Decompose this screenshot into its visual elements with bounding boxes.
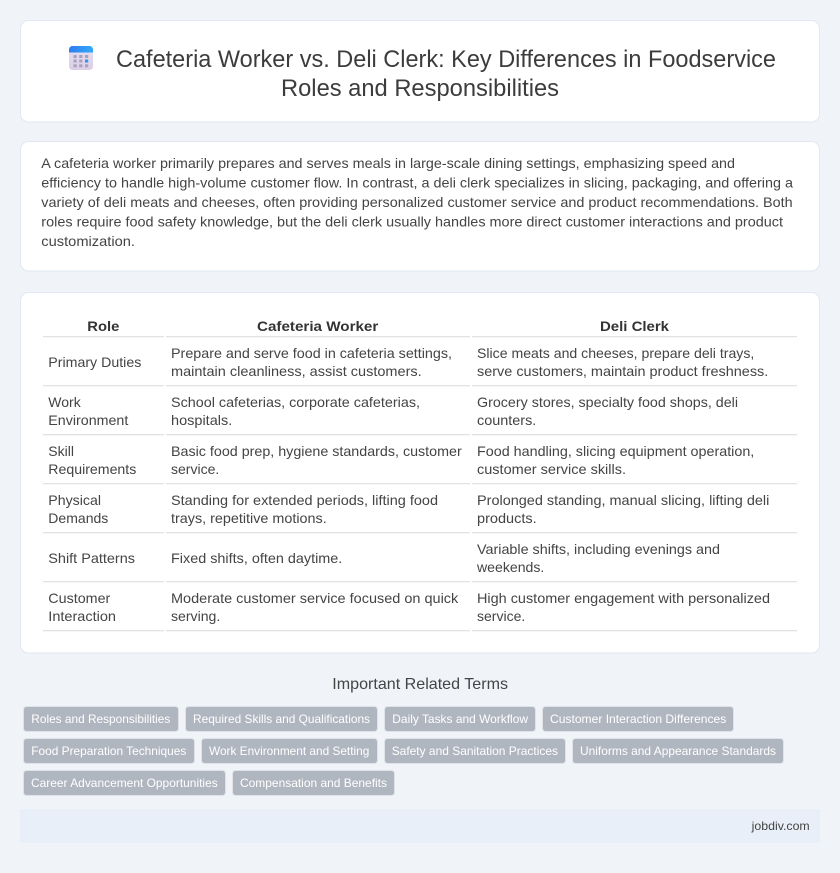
row: skill requirements: service. bbox=[171, 461, 219, 477]
row: physical demands: Prolonged standing, manual slicing, lifting deli bbox=[477, 492, 769, 508]
tag list: related terms: Uniforms and Appearance Standards bbox=[580, 744, 776, 758]
row: work environment: Work bbox=[48, 394, 82, 410]
title: Roles and Responsibilities bbox=[281, 75, 559, 102]
row: work environment: Grocery stores, specialty food shops, deli bbox=[477, 394, 738, 410]
tag list: related terms: Work Environment and Setting bbox=[209, 744, 369, 758]
text block: summary paragraph: roles require food safety knowledge, but the deli clerk usually handles more direct customer interactions and product bbox=[41, 213, 783, 229]
panel: introduction bbox=[20, 142, 820, 271]
row: skill requirements: Requirements bbox=[48, 461, 136, 477]
row: physical demands: Standing for extended periods, lifting food bbox=[171, 492, 438, 508]
row: customer interaction: serving. bbox=[171, 608, 220, 624]
row: work environment: counters. bbox=[477, 412, 536, 428]
row: customer interaction: Moderate customer service focused on quick bbox=[171, 590, 459, 606]
title: Cafeteria Worker vs. Deli Clerk: Key Differences in Foodservice bbox=[116, 46, 776, 73]
table header row: Cafeteria Worker bbox=[257, 318, 379, 334]
row: skill requirements: Basic food prep, hygiene standards, customer bbox=[171, 443, 462, 459]
table header row: Deli Clerk bbox=[600, 318, 669, 334]
text block: summary paragraph: efficiency to handle high-volume customer flow. In contrast, a deli clerk specializes in slicing, packaging, and offering a bbox=[41, 174, 793, 190]
tag list: related terms: Food Preparation Techniques bbox=[31, 744, 186, 758]
tag list: related terms bbox=[24, 706, 784, 796]
row: skill requirements: customer service skills. bbox=[477, 461, 626, 477]
row: skill requirements bbox=[48, 443, 754, 477]
tag list: related terms: Daily Tasks and Workflow bbox=[392, 712, 528, 726]
row: physical demands: Demands bbox=[48, 510, 108, 526]
text block: summary paragraph: customization. bbox=[41, 233, 135, 249]
row: customer interaction bbox=[48, 590, 770, 624]
row: customer interaction: High customer engagement with personalized bbox=[477, 590, 770, 606]
tag list: related terms: Compensation and Benefits bbox=[240, 776, 387, 790]
tag list: related terms: Required Skills and Qualifications bbox=[193, 712, 370, 726]
row: work environment bbox=[48, 394, 738, 428]
text block: summary paragraph: variety of deli meats and cheeses, often providing personalized customer service and product recommendations. Both bbox=[41, 194, 793, 210]
footer bbox=[20, 809, 820, 843]
heading: related terms: Important Related Terms bbox=[332, 676, 508, 693]
row: customer interaction: Customer bbox=[48, 590, 111, 606]
row: shift patterns: Variable shifts, including evenings and bbox=[477, 541, 720, 557]
row: primary duties: Primary Duties bbox=[48, 354, 141, 370]
tag list: related terms: Safety and Sanitation Practices bbox=[392, 744, 558, 758]
table header row: Role bbox=[87, 318, 120, 334]
row: primary duties: Slice meats and cheeses, prepare deli trays, bbox=[477, 345, 754, 361]
row: physical demands: Physical bbox=[48, 492, 101, 508]
text block: summary paragraph: A cafeteria worker primarily prepares and serves meals in large-scale dining settings, emphasizing speed and bbox=[41, 155, 735, 171]
row: primary duties: Prepare and serve food in cafeteria settings, bbox=[171, 345, 452, 361]
row: work environment: School cafeterias, corporate cafeterias, bbox=[171, 394, 420, 410]
row: work environment: hospitals. bbox=[171, 412, 232, 428]
row: work environment: Environment bbox=[48, 412, 128, 428]
title bbox=[116, 46, 776, 102]
table header row bbox=[87, 318, 669, 334]
footer: jobdiv.com bbox=[751, 819, 810, 833]
row: physical demands bbox=[48, 492, 769, 526]
row: customer interaction: Interaction bbox=[48, 608, 116, 624]
row: shift patterns: weekends. bbox=[476, 559, 544, 575]
text block: summary paragraph bbox=[41, 155, 793, 249]
row: skill requirements: Skill bbox=[48, 443, 74, 459]
tag list: related terms: Career Advancement Opportunities bbox=[31, 776, 218, 790]
icon: calendar bbox=[69, 46, 93, 70]
row: shift patterns: Fixed shifts, often daytime. bbox=[171, 550, 342, 566]
row: shift patterns bbox=[48, 541, 720, 575]
tag list: related terms: Customer Interaction Differences bbox=[550, 712, 726, 726]
row: customer interaction: service. bbox=[477, 608, 525, 624]
row: primary duties bbox=[48, 345, 768, 379]
row: skill requirements: Food handling, slicing equipment operation, bbox=[477, 443, 754, 459]
row: physical demands: products. bbox=[477, 510, 537, 526]
row: primary duties: maintain cleanliness, assist customers. bbox=[171, 363, 422, 379]
panel: header bbox=[20, 20, 820, 122]
row: physical demands: trays, repetitive motions. bbox=[171, 510, 327, 526]
row: shift patterns: Shift Patterns bbox=[48, 550, 135, 566]
row: primary duties: serve customers, maintain product freshness. bbox=[477, 363, 768, 379]
panel: comparison table bbox=[20, 292, 820, 653]
tag list: related terms: Roles and Responsibilities bbox=[31, 712, 170, 726]
